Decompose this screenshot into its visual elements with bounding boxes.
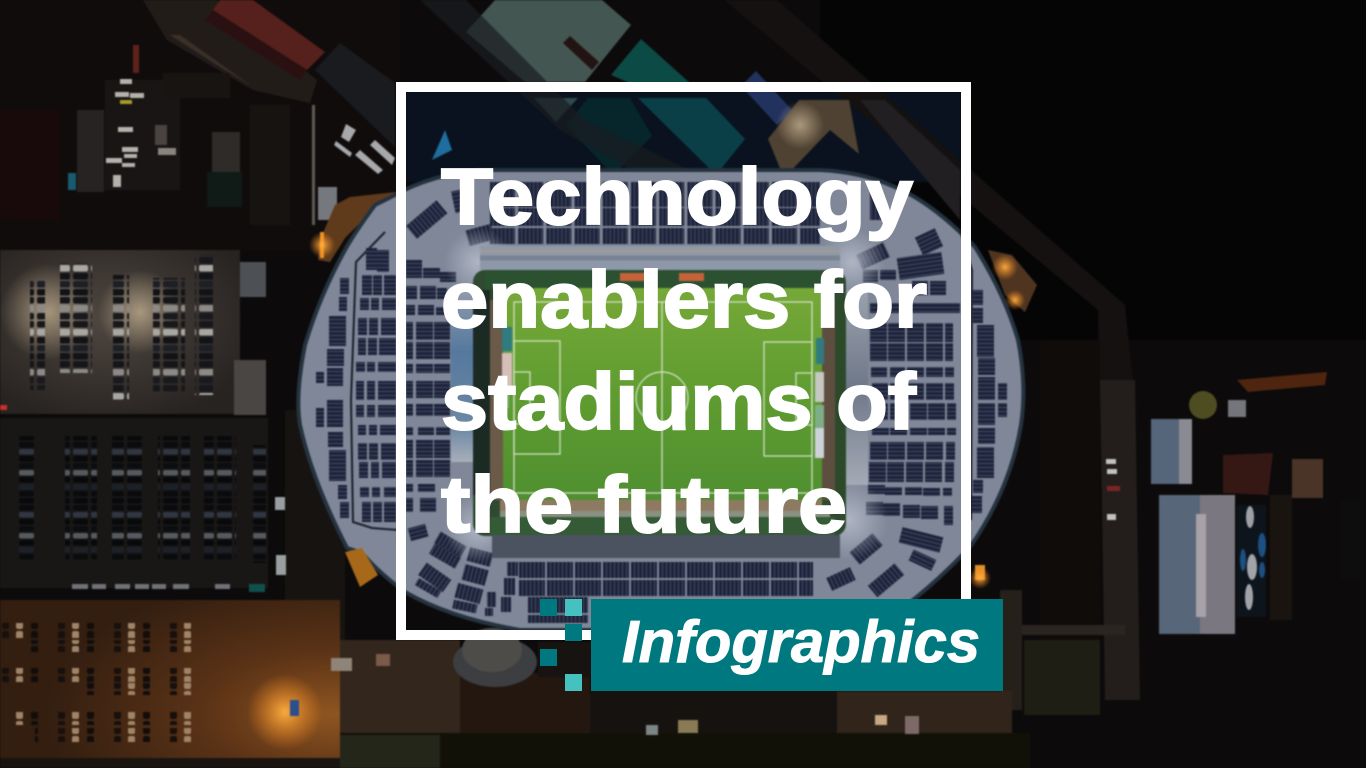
orange glow around stadium — [345, 250, 1037, 655]
title: stadiums of — [441, 357, 916, 446]
buildings: right side — [1106, 372, 1360, 634]
road and buildings: upper left — [68, 0, 395, 225]
title — [441, 152, 927, 549]
parking lot: lower left, orange lit — [0, 600, 340, 768]
decorative squares — [540, 599, 582, 691]
crowd and entrance building: bottom — [331, 628, 1100, 768]
buildings and pools: top — [420, 0, 960, 220]
football pitch — [502, 288, 824, 500]
stadium bowl — [444, 228, 888, 562]
parking lot: middle left — [0, 418, 286, 592]
solar panels: top and bottom bands — [490, 182, 820, 623]
title: enablers for — [441, 255, 927, 344]
solar panels: right corners — [826, 190, 944, 597]
roof structure lines — [351, 230, 972, 530]
title: Technology — [441, 152, 914, 241]
label: Infographics: Infographics — [622, 609, 980, 675]
solar panels: left corners — [406, 189, 518, 616]
title: the future — [441, 460, 847, 549]
label: Infographics — [591, 599, 1003, 691]
ledge lit orange: left of stadium — [309, 192, 396, 262]
solar panels: right side — [863, 270, 1007, 525]
parking lot: upper left — [0, 250, 266, 415]
stadium — [298, 170, 1023, 630]
stadium roof — [298, 170, 1023, 630]
solar panels: left side — [316, 248, 456, 545]
white frame — [401, 87, 966, 635]
